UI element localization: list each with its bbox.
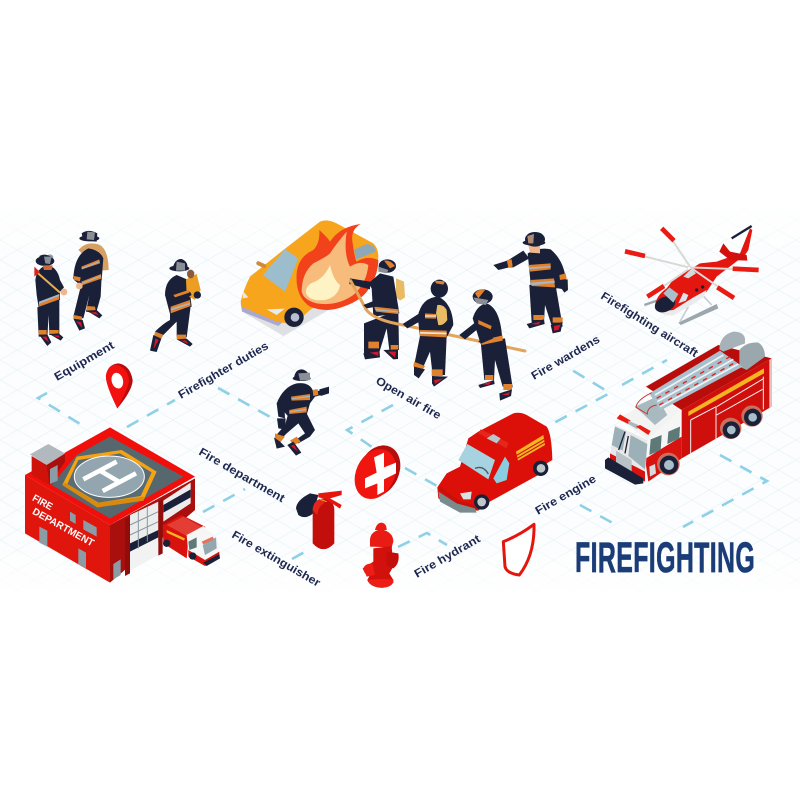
firefighter: fire warden pointing <box>493 232 568 333</box>
roof annex <box>32 456 49 485</box>
building sign: DEPARTMENT <box>30 506 96 549</box>
firefighter: running <box>274 369 329 456</box>
firefighter with axe <box>34 254 67 346</box>
firefighter with hose coil <box>73 231 109 331</box>
panel: isometric grid background <box>0 200 800 600</box>
title: FIREFIGHTING <box>575 534 755 582</box>
dashed connector lines <box>38 360 767 559</box>
firefighter carrying child <box>150 259 201 352</box>
fire hose <box>351 281 525 351</box>
fire van <box>437 413 552 513</box>
icon: shield <box>503 524 534 575</box>
windows and doors <box>39 512 121 579</box>
building sign: FIRE <box>30 493 54 513</box>
fire station building <box>25 427 220 583</box>
label: Open air fire: Open air fire <box>374 375 443 422</box>
fire hydrant <box>363 523 399 588</box>
roof with helipad <box>25 427 195 525</box>
firefighter: front of hose <box>459 289 513 401</box>
firefighters holding hose <box>349 259 525 401</box>
firefighter: back view <box>403 280 453 387</box>
fire extinguisher <box>296 491 342 549</box>
icon: location pin <box>106 363 133 408</box>
label: Fire extinguisher: Fire extinguisher <box>230 529 323 590</box>
helicopter <box>625 226 759 325</box>
firefighter: nozzle man <box>349 259 405 359</box>
burning car <box>241 220 378 336</box>
label: Fire engine: Fire engine <box>534 473 598 518</box>
label: Firefighting aircraft: Firefighting aircraft <box>598 290 700 360</box>
label: Firefighter duties: Firefighter duties <box>176 340 271 402</box>
icon: medical cross sign <box>347 438 408 506</box>
fire truck <box>605 332 772 485</box>
label: Equipment: Equipment <box>52 340 117 384</box>
label: Fire hydrant: Fire hydrant <box>412 533 483 581</box>
label: Fire department: Fire department <box>196 446 287 505</box>
label: Fire wardens: Fire wardens <box>530 334 602 383</box>
walls <box>25 475 110 583</box>
small fire truck in garage <box>163 515 220 566</box>
